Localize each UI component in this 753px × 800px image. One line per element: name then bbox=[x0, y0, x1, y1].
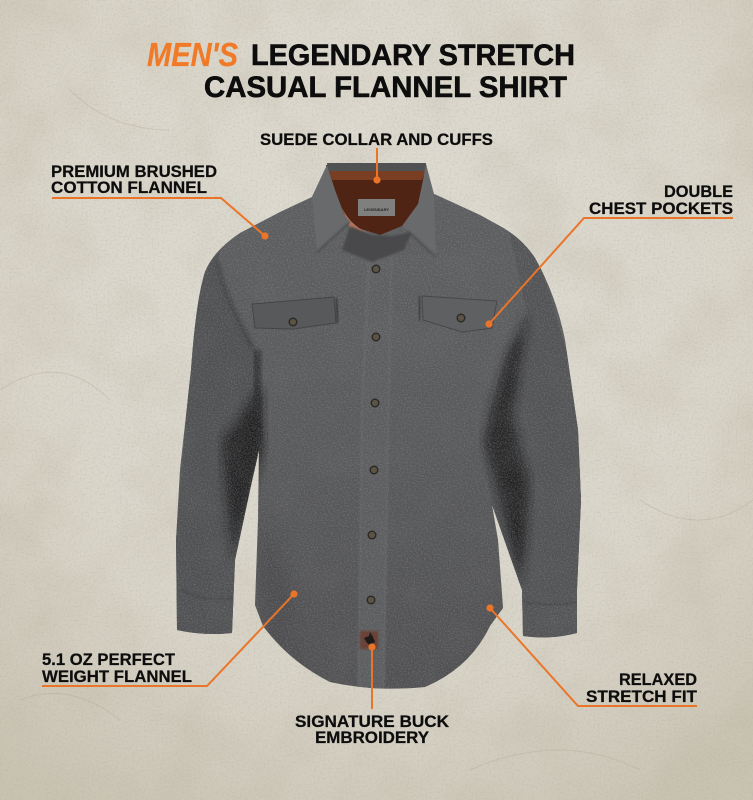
neck label: LEGENDARY bbox=[364, 207, 389, 212]
callout: suede collar and cuffs: SUEDE COLLAR AND CUFFS bbox=[260, 130, 493, 149]
callout: premium brushed cotton flannel: PREMIUM BRUSHED bbox=[51, 162, 217, 181]
fold shading bbox=[182, 262, 577, 670]
left sleeve bbox=[176, 235, 262, 640]
buck embroidery patch bbox=[360, 631, 378, 649]
shirt body bbox=[170, 160, 590, 695]
callout: relaxed stretch fit: STRETCH FIT bbox=[586, 687, 698, 706]
right sleeve bbox=[492, 232, 581, 638]
placket bbox=[358, 347, 390, 689]
right pocket flap bbox=[419, 296, 497, 332]
callout: relaxed stretch fit: RELAXED bbox=[619, 670, 697, 689]
callout: signature buck embroidery bbox=[295, 643, 450, 747]
left pocket flap bbox=[252, 297, 338, 329]
callout: double chest pockets bbox=[485, 182, 733, 328]
title accent: men's: MEN'S bbox=[147, 36, 238, 73]
callout: signature buck embroidery: SIGNATURE BUCK bbox=[295, 712, 450, 731]
callout: signature buck embroidery: EMBROIDERY bbox=[315, 728, 430, 747]
callout: suede collar and cuffs bbox=[260, 130, 493, 184]
collar points bbox=[312, 164, 436, 257]
callout: relaxed stretch fit bbox=[486, 604, 698, 706]
buttons bbox=[289, 265, 465, 604]
title bbox=[147, 36, 575, 104]
callout: 5.1 oz perfect weight flannel: WEIGHT FLANNEL bbox=[42, 667, 192, 686]
title line 1: LEGENDARY STRETCH bbox=[251, 39, 575, 72]
callout: 5.1 oz perfect weight flannel: 5.1 OZ PERFECT bbox=[42, 650, 176, 669]
callout: premium brushed cotton flannel: COTTON FLANNEL bbox=[51, 178, 207, 197]
collar interior bbox=[326, 163, 430, 262]
title line 2: CASUAL FLANNEL SHIRT bbox=[204, 71, 567, 104]
shirt photo bbox=[176, 163, 581, 689]
shirt silhouette bbox=[176, 166, 581, 689]
callout: 5.1 oz perfect weight flannel bbox=[42, 590, 298, 686]
callout: double chest pockets: DOUBLE bbox=[664, 182, 733, 201]
callout: double chest pockets: CHEST POCKETS bbox=[589, 199, 733, 218]
callout: premium brushed cotton flannel bbox=[51, 162, 269, 240]
